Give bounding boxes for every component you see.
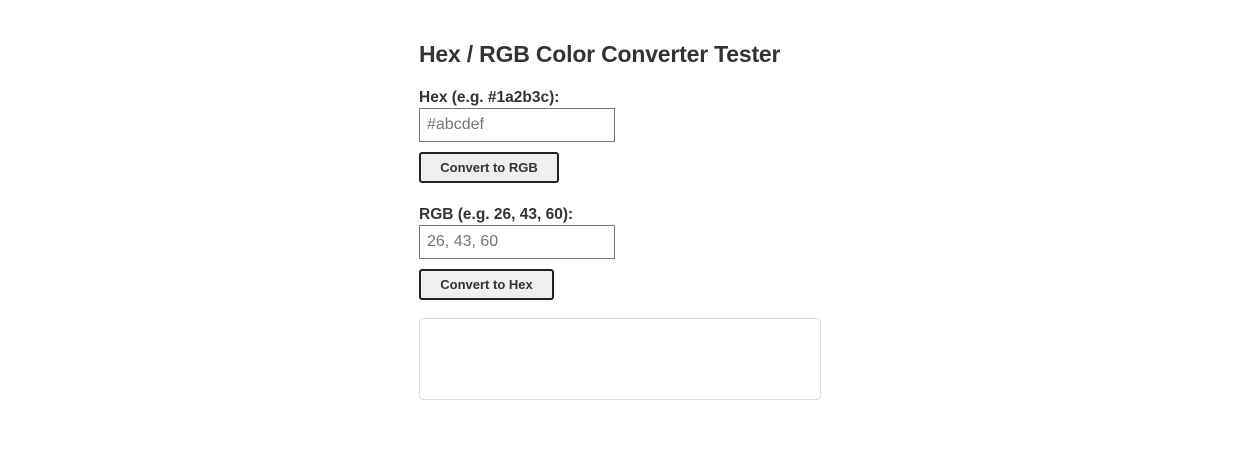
button: convert to RGB	[419, 152, 559, 183]
label: hex: Hex (e.g. #1a2b3c):	[419, 89, 559, 106]
button: convert to Hex	[419, 269, 554, 300]
label: rgb: RGB (e.g. 26, 43, 60):	[419, 206, 573, 223]
title: Hex / RGB Color Converter Tester	[419, 41, 780, 67]
input: rgb: 26, 43, 60	[427, 233, 498, 250]
input: rgb	[419, 225, 615, 259]
input: hex: #abcdef	[427, 116, 484, 133]
button: convert to RGB: Convert to RGB	[440, 160, 538, 175]
button: convert to Hex: Convert to Hex	[440, 277, 533, 292]
input: hex	[419, 108, 615, 142]
result box	[419, 318, 821, 400]
